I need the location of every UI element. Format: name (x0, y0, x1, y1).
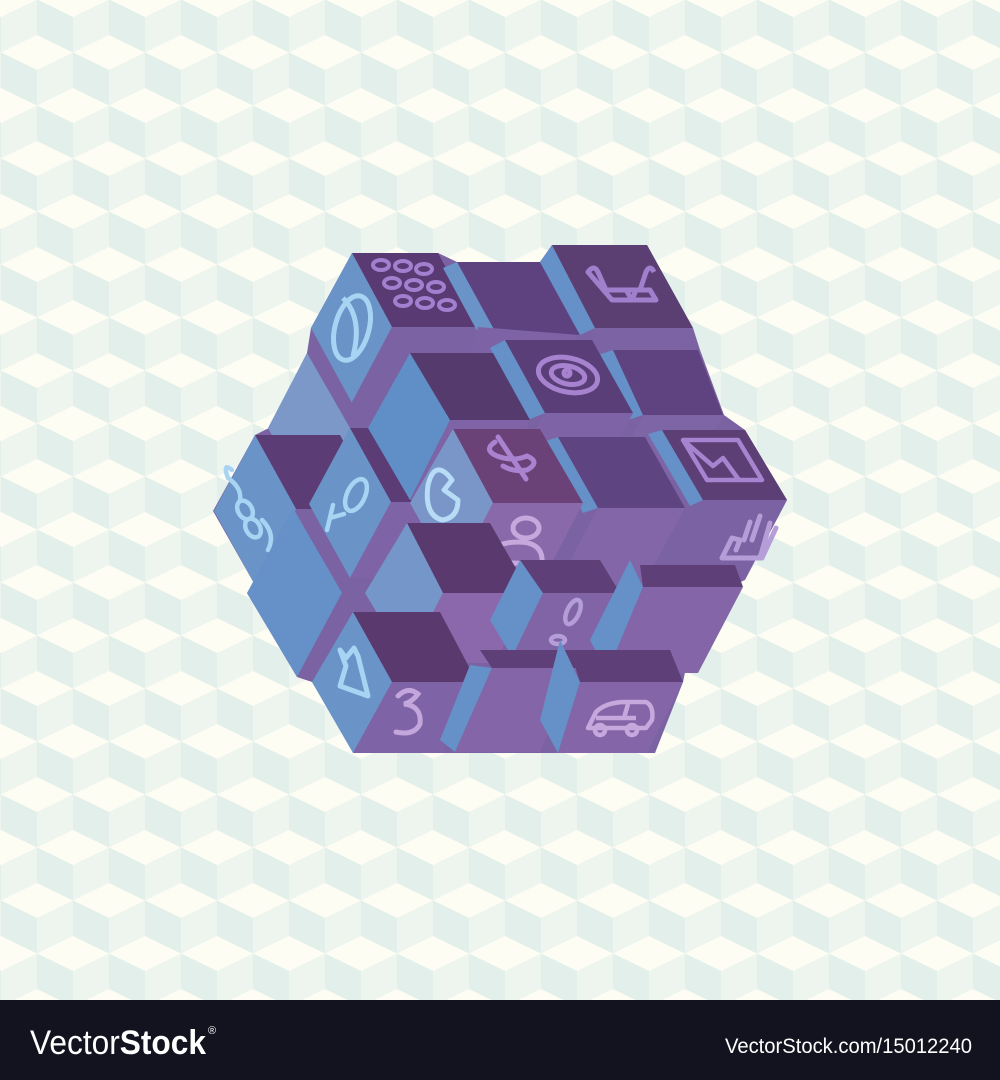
icon: envelope (683, 440, 762, 480)
icon: dots (373, 260, 455, 310)
cube: top plain (443, 262, 580, 410)
cube: bottom right plain (590, 560, 743, 673)
cube: dollar (410, 429, 583, 580)
icon: delta8 (226, 467, 271, 550)
cube: shirt (312, 612, 477, 753)
footer url: VectorStock.com/15012240 (725, 1035, 972, 1058)
icon: person (478, 518, 542, 564)
icon: shell (327, 292, 377, 364)
icon: yu (327, 476, 371, 530)
icon: shirt (340, 648, 368, 696)
icon: car (588, 702, 652, 735)
cube: big blue (247, 508, 430, 677)
cube: target (490, 340, 633, 490)
cube: center plain (365, 523, 530, 663)
cube: glasses (540, 245, 693, 400)
cube: envelope (648, 430, 787, 578)
cube: big dark (368, 353, 530, 500)
footer bar: ® (208, 1025, 216, 1037)
cube: yu (309, 428, 476, 578)
icon: hand (722, 516, 776, 558)
silhouette base (213, 245, 787, 753)
cube: delta8 (214, 435, 381, 585)
icon: glasses (588, 268, 656, 300)
icon: target (535, 352, 601, 398)
icon: dollar (489, 437, 534, 479)
cube: dots (311, 253, 478, 403)
footer logo: VectorStock (30, 1024, 206, 1062)
cube: exclamation (490, 560, 620, 657)
cube cluster (213, 245, 787, 753)
cube: car (540, 640, 683, 753)
cube: right of target (598, 350, 723, 480)
cube: bottom center (440, 650, 577, 752)
icon: ain glyph (396, 690, 420, 733)
icon: exclamation (551, 598, 584, 644)
icon: pacman (427, 470, 458, 520)
footer bar (0, 1000, 1000, 1080)
cube: back left plain (268, 353, 350, 505)
cube: plain right of dollar (543, 437, 685, 585)
